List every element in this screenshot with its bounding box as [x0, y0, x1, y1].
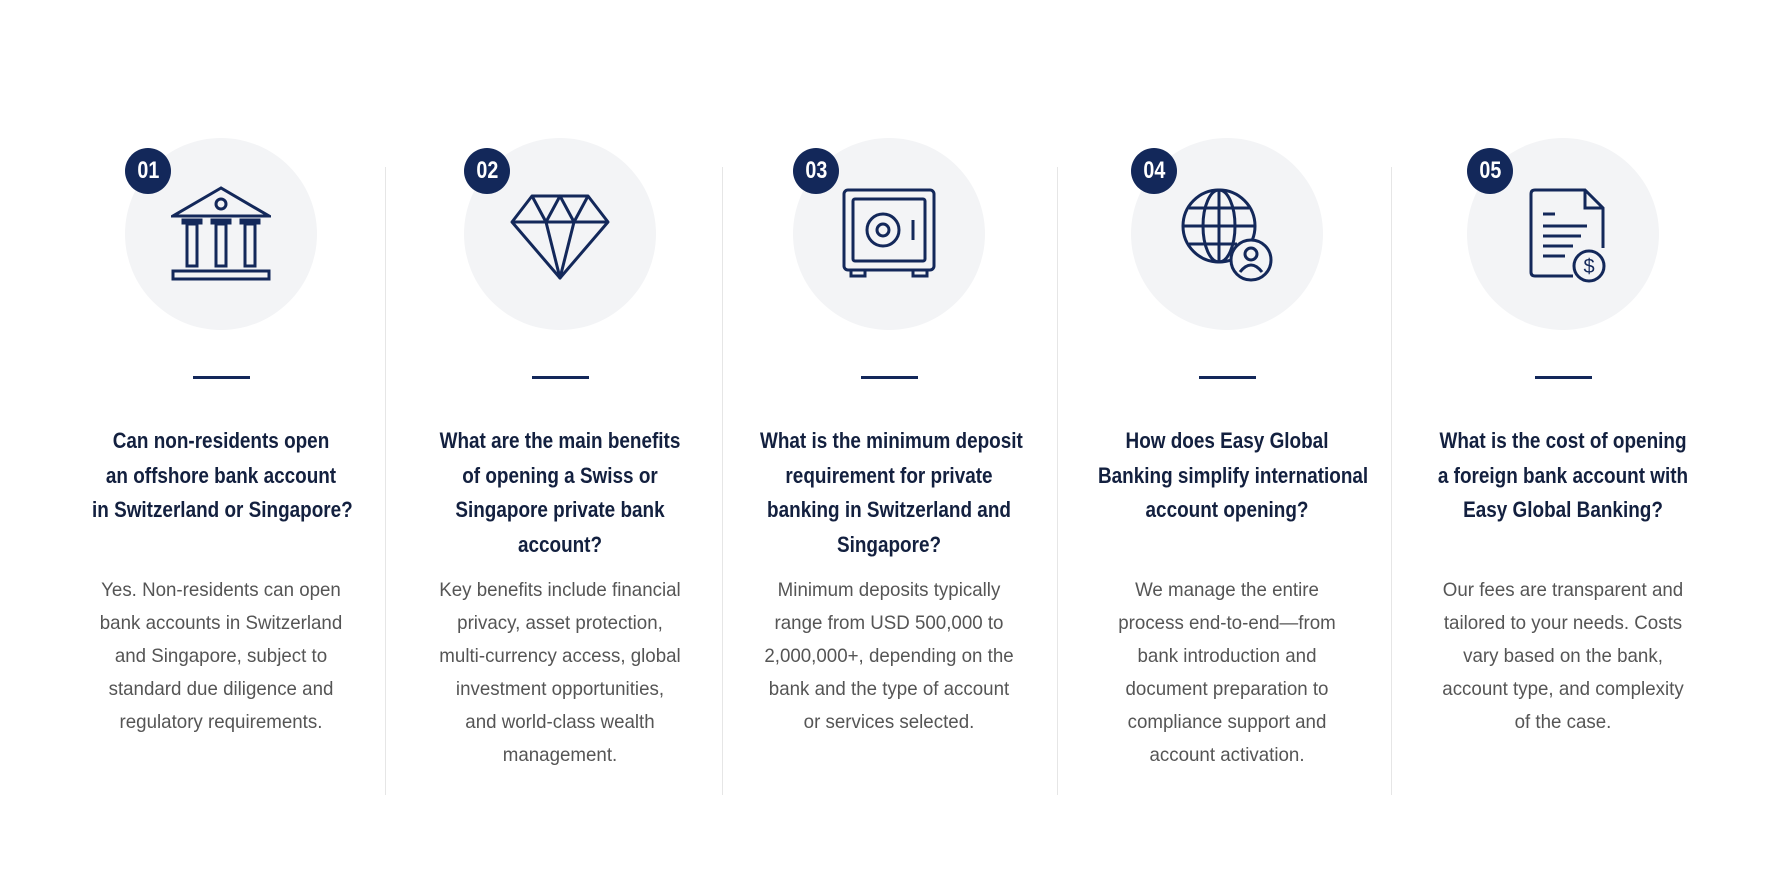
icon circle: [464, 138, 656, 330]
text: regulatory requirements.: [120, 711, 322, 733]
icon: bank: [171, 186, 271, 280]
heading: Banking simplify international: [1098, 462, 1368, 488]
text: of the case.: [1515, 711, 1611, 733]
panel: column 5: [1438, 138, 1688, 733]
text: and Singapore, subject to: [115, 645, 327, 667]
text: account type, and complexity: [1442, 678, 1684, 700]
badge 01: [125, 148, 171, 194]
text: Key benefits include financial: [439, 579, 681, 601]
icon: document with dollar: [1530, 188, 1606, 282]
text: or services selected.: [804, 711, 974, 733]
badge 05: [1467, 148, 1513, 194]
text: management.: [503, 744, 617, 766]
heading: requirement for private: [785, 462, 993, 488]
heading: Can non-residents open: [113, 428, 329, 453]
text: tailored to your needs. Costs: [1444, 612, 1682, 634]
badge 02: 02: [476, 157, 498, 184]
heading: a foreign bank account with: [1438, 462, 1688, 488]
divider: [193, 376, 250, 379]
divider: [532, 376, 589, 379]
heading: What is the minimum deposit: [760, 428, 1023, 453]
panel: column 1: [92, 138, 353, 733]
badge 03: [793, 148, 839, 194]
panel: column 3: [760, 138, 1023, 733]
text: We manage the entire: [1135, 579, 1319, 601]
badge 03: 03: [805, 157, 827, 184]
text: [764, 579, 1014, 733]
text: [1118, 579, 1336, 766]
text: standard due diligence and: [109, 678, 333, 700]
heading: [440, 428, 680, 556]
text: investment opportunities,: [456, 678, 664, 700]
text: bank introduction and: [1137, 645, 1317, 667]
text: account activation.: [1149, 744, 1305, 766]
text: process end-to-end—from: [1118, 612, 1336, 634]
icon circle: [125, 138, 317, 330]
text: document preparation to: [1126, 678, 1328, 700]
text: multi-currency access, global: [439, 645, 681, 667]
heading: of opening a Swiss or: [462, 462, 658, 488]
heading: an offshore bank account: [106, 462, 336, 488]
text: privacy, asset protection,: [457, 612, 663, 634]
heading: [92, 428, 353, 522]
badge 04: [1131, 148, 1177, 194]
heading: Easy Global Banking?: [1463, 497, 1663, 522]
heading: account opening?: [1146, 497, 1308, 522]
divider: [861, 376, 918, 379]
icon: safe: [842, 188, 936, 278]
heading: Singapore?: [837, 532, 941, 556]
text: bank accounts in Switzerland: [100, 612, 342, 634]
heading: banking in Switzerland and: [767, 497, 1011, 522]
divider: [1535, 376, 1592, 379]
heading: Singapore private bank: [455, 497, 665, 522]
badge 05: 05: [1479, 157, 1501, 184]
icon circle: [1131, 138, 1323, 330]
text: [439, 579, 681, 766]
heading: What is the cost of opening: [1439, 428, 1687, 453]
heading: What are the main benefits: [440, 428, 680, 453]
icon: document with dollar: $: [1583, 256, 1595, 278]
text: Minimum deposits typically: [778, 579, 1000, 601]
text: [100, 579, 342, 733]
badge 02: [464, 148, 510, 194]
badge 04: 04: [1143, 157, 1165, 184]
heading: How does Easy Global: [1126, 428, 1328, 453]
panel: column 2: [439, 138, 681, 766]
icon: globe with user: [1182, 188, 1272, 282]
heading: account?: [518, 532, 602, 556]
heading: in Switzerland or Singapore?: [92, 497, 353, 522]
text: Yes. Non-residents can open: [101, 579, 341, 601]
text: and world-class wealth: [465, 711, 655, 733]
icon: diamond: [510, 194, 610, 280]
icon circle: [1467, 138, 1659, 330]
text: Our fees are transparent and: [1443, 579, 1683, 601]
text: vary based on the bank,: [1463, 645, 1663, 667]
icon circle: [793, 138, 985, 330]
heading: [1098, 428, 1368, 522]
text: 2,000,000+, depending on the: [764, 645, 1014, 667]
heading: [1438, 428, 1688, 522]
text: bank and the type of account: [769, 678, 1009, 700]
text: range from USD 500,000 to: [775, 612, 1003, 634]
heading: [760, 428, 1023, 556]
text: [1442, 579, 1684, 733]
divider: [1199, 376, 1256, 379]
text: compliance support and: [1128, 711, 1326, 733]
panel: column 4: [1098, 138, 1368, 766]
badge 01: 01: [137, 157, 159, 184]
